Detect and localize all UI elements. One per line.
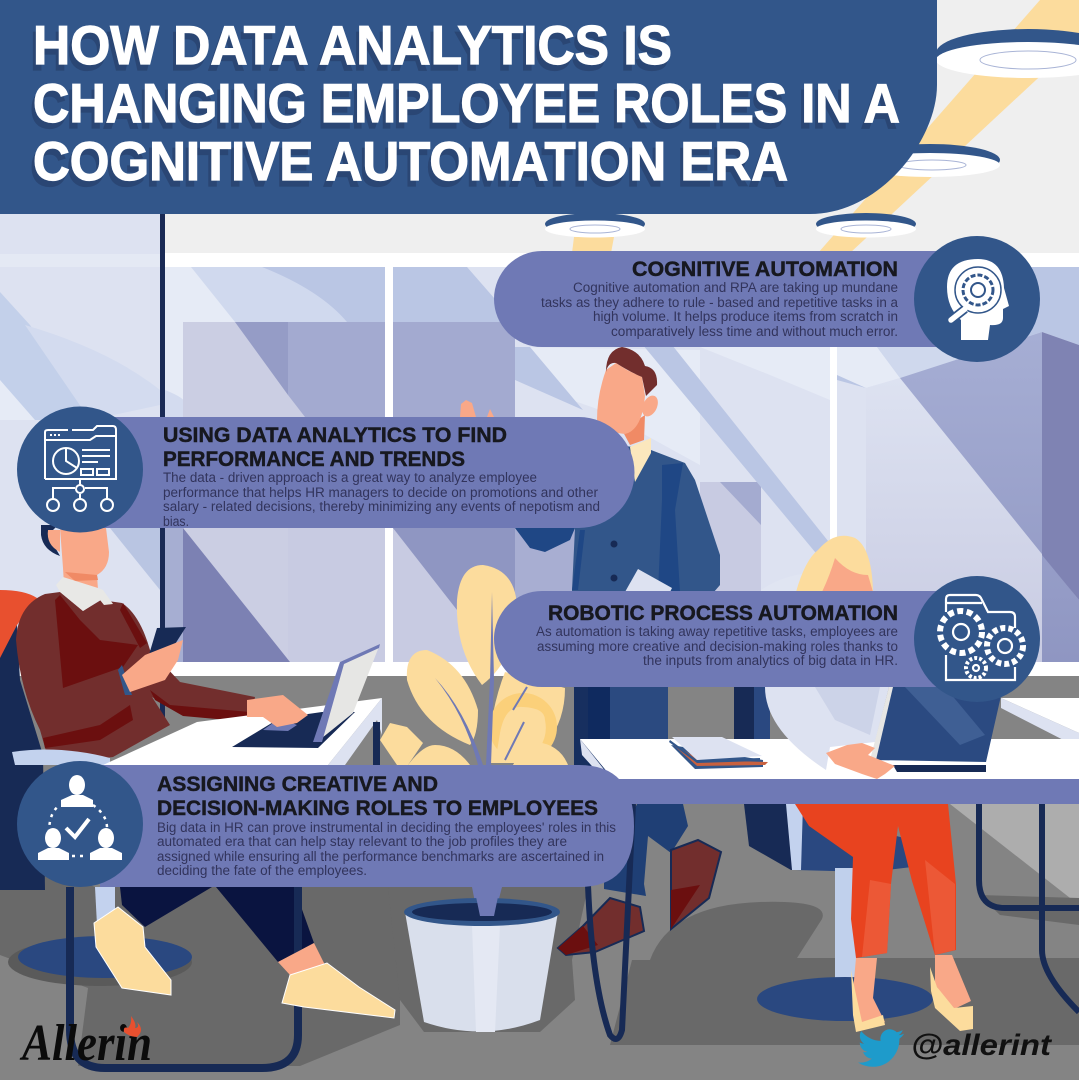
title	[33, 14, 900, 192]
logo: Allerin: Allerin	[19, 1015, 152, 1072]
heading: DECISION-MAKING ROLES TO EMPLOYEES	[157, 797, 598, 820]
icon: head with gear and magnifier	[914, 236, 1040, 362]
body text: assigned while ensuring all the performance benchmarks are ascertained in	[157, 849, 604, 864]
seated man	[0, 525, 395, 1068]
woman's chair back	[734, 687, 770, 747]
heading: COGNITIVE AUTOMATION	[632, 258, 898, 281]
title: CHANGING EMPLOYEE ROLES IN A	[33, 72, 900, 134]
icon: twitter bird	[858, 1029, 904, 1067]
title: HOW DATA ANALYTICS IS	[33, 14, 672, 76]
panel: assigning creative roles	[17, 761, 1079, 887]
heading: PERFORMANCE AND TRENDS	[163, 448, 465, 471]
title: COGNITIVE AUTOMATION ERA	[33, 130, 788, 192]
body text: the inputs from analytics of big data in HR.	[643, 653, 898, 668]
ceiling lights and beams	[545, 0, 1079, 253]
plant	[380, 565, 568, 918]
laptop	[232, 644, 380, 748]
body text	[157, 820, 616, 878]
body text	[163, 470, 600, 529]
panel: cognitive automation	[494, 236, 1040, 362]
icon: dashboard with network	[17, 406, 143, 532]
body text: As automation is taking away repetitive tasks, employees are	[536, 624, 898, 639]
body text: performance that helps HR managers to decide on promotions and other	[163, 485, 599, 500]
heading	[163, 424, 507, 471]
seated woman	[744, 536, 1003, 1032]
body text: comparatively less time and without much error.	[611, 324, 898, 339]
body text: tasks as they adhere to rule - based and repetitive tasks in a	[541, 295, 898, 310]
man's shoes	[558, 840, 721, 955]
heading: ROBOTIC PROCESS AUTOMATION	[548, 602, 898, 625]
icon: team with check mark	[17, 761, 143, 887]
heading: ASSIGNING CREATIVE AND	[157, 773, 438, 796]
icon: folder with gears	[914, 576, 1040, 702]
body text: Cognitive automation and RPA are taking up mundane	[573, 280, 898, 295]
books	[669, 737, 768, 769]
body text: deciding the fate of the employees.	[157, 863, 367, 878]
body text: Big data in HR can prove instrumental in deciding the employees' roles in this	[157, 820, 616, 835]
body text: salary - related decisions, thereby minimizing any events of nepotism and	[163, 499, 600, 514]
heading	[157, 773, 598, 820]
body text	[541, 280, 898, 339]
plant pot	[404, 887, 560, 1032]
body text: bias.	[163, 514, 189, 529]
heading: USING DATA ANALYTICS TO FIND	[163, 424, 507, 447]
panel: robotic process automation	[494, 576, 1040, 702]
body text	[536, 624, 898, 668]
standing man	[460, 347, 721, 955]
woman's laptop	[870, 687, 1003, 772]
panel: using data analytics	[17, 406, 635, 532]
twitter handle: @allerint	[911, 1029, 1053, 1062]
desk top	[580, 737, 1079, 779]
body text: high volume. It helps produce items from scratch in	[593, 309, 898, 324]
body text: The data - driven approach is a great way to analyze employee	[163, 470, 537, 485]
body text: assuming more creative and decision-making roles thanks to	[537, 639, 898, 654]
body text: automated era that can help stay relevant to the job profiles they are	[157, 834, 567, 849]
right desk with legs	[588, 698, 1079, 1039]
header panel	[0, 0, 937, 214]
